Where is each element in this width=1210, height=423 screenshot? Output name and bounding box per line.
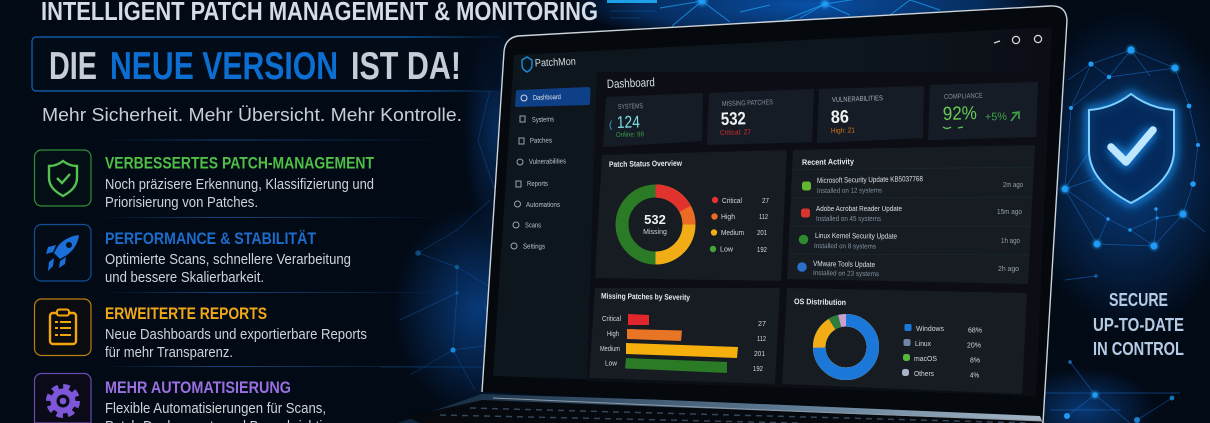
panel: recent activity: Recent Activity (802, 157, 855, 167)
feature: reports (34, 299, 367, 361)
bar chart: 201 (754, 349, 765, 358)
sidebar: Scans (525, 220, 541, 230)
feature description: Neue Dashboards und exportierbare Reports (105, 327, 367, 343)
sidebar (511, 87, 591, 251)
activity row: VMware: VMware Tools Update (813, 259, 875, 269)
feature description: für mehr Transparenz. (105, 345, 233, 361)
feature: performance (34, 224, 351, 286)
activity row: Linux (799, 231, 1020, 251)
feature description: und bessere Skalierbarkeit. (105, 270, 264, 286)
card: systems (603, 93, 703, 147)
headline box (32, 37, 500, 91)
activity row: Microsoft: Installed on 12 systems (817, 187, 882, 195)
legend: High (721, 212, 735, 221)
card: systems: ( (609, 120, 613, 131)
brand: PatchMon (535, 56, 576, 69)
card: compliance: COMPLIANCE (944, 93, 983, 101)
laptop (398, 6, 1067, 423)
card: vulnerabilities: VULNERABILITIES (832, 95, 883, 104)
legend: macOS (914, 354, 937, 363)
card: compliance: 92% (943, 103, 977, 125)
card: systems: 124 (617, 112, 640, 132)
legend (902, 324, 982, 380)
screen (493, 27, 1052, 396)
sidebar: Reports (527, 179, 548, 188)
activity row: Linux: Installed on 8 systems (814, 243, 876, 251)
legend: 112 (759, 212, 768, 221)
feature: automation (34, 374, 370, 423)
card: missing patches: 532 (721, 108, 746, 129)
legend: 192 (757, 245, 767, 254)
activity row: Linux: 1h ago (1001, 238, 1020, 245)
panel: missing patches by severity (589, 288, 780, 384)
network pattern (380, 0, 1205, 423)
icon: glowing shield (1089, 94, 1174, 203)
brand (522, 56, 576, 72)
sidebar: Systems (532, 114, 554, 124)
icon: green shield (34, 150, 91, 206)
right tagline (1093, 290, 1184, 359)
activity row: VMware (797, 259, 1019, 278)
legend: Critical (722, 196, 742, 205)
activity row: Adobe: Installed on 45 systems (816, 216, 881, 223)
card: missing patches: Critical: 27 (720, 127, 751, 137)
sidebar: Dashboard (533, 92, 561, 102)
legend: 27 (762, 196, 769, 205)
feature: patch management (34, 150, 374, 211)
card: compliance: +5% (985, 111, 1007, 123)
icon: rocket (34, 224, 91, 281)
bar chart: 27 (758, 319, 766, 328)
headline text: DIE (49, 45, 97, 88)
card: vulnerabilities: High: 21 (831, 125, 855, 135)
feature title: MEHR AUTOMATISIERUNG (105, 378, 291, 397)
panel: missing patches by severity: Missing Patches by Severity (601, 292, 691, 302)
activity row: VMware: 2h ago (998, 266, 1019, 273)
feature description: Priorisierung von Patches. (105, 195, 258, 211)
legend: Low (720, 244, 733, 254)
bar chart: High (607, 329, 619, 338)
feature description: Noch präzisere Erkennung, Klassifizierung und (105, 177, 374, 193)
feature description (105, 327, 367, 361)
donut chart: 532 (644, 212, 666, 227)
legend: Others (914, 369, 934, 378)
dividers (100, 140, 450, 367)
sidebar: Vulnerabilities (529, 156, 566, 166)
sidebar: Automations (526, 200, 560, 209)
legend: Medium (721, 228, 744, 237)
top-right controls (994, 35, 1042, 44)
bar chart: 112 (757, 334, 766, 343)
legend: Windows (916, 324, 944, 333)
feature title: VERBESSERTES PATCH-MANAGEMENT (105, 153, 374, 172)
activity row: Microsoft: Microsoft Security Update KB5037768 (817, 174, 923, 185)
feature title: PERFORMANCE & STABILITÄT (105, 229, 317, 248)
activity row: Microsoft: 2m ago (1003, 182, 1023, 189)
accent line (607, 0, 657, 3)
legend: 68% (968, 326, 982, 334)
headline text: NEUE VERSION (110, 45, 338, 88)
headline text: IST DA! (351, 45, 461, 88)
right tagline: UP-TO-DATE (1093, 315, 1184, 335)
right tagline: SECURE (1109, 290, 1168, 310)
panel: patch status overview: Patch Status Overview (609, 159, 683, 169)
card: systems: SYSTEMS (618, 103, 643, 111)
card: systems: Online: 98 (616, 131, 644, 139)
bar chart: Medium (600, 344, 620, 353)
bar chart: Critical (602, 314, 621, 323)
activity row: VMware: Installed on 23 systems (813, 270, 880, 278)
legend: Linux (915, 339, 931, 348)
feature description (105, 252, 351, 286)
active nav item (515, 87, 591, 107)
feature description: Flexible Automatisierungen für Scans, (105, 401, 326, 417)
activity row: Adobe: Adobe Acrobat Reader Update (816, 204, 902, 213)
laptop base (398, 394, 1043, 423)
feature title: ERWEITERTE REPORTS (105, 304, 267, 323)
card: compliance (928, 82, 1038, 140)
lid outline (482, 6, 1067, 423)
feature description (105, 177, 374, 211)
legend: 4% (970, 370, 979, 380)
legend: 201 (757, 228, 767, 237)
sidebar: Settings (523, 242, 545, 251)
page title: Dashboard (607, 75, 655, 91)
icon: gear (34, 374, 91, 423)
card: vulnerabilities (817, 86, 924, 143)
laptop lid (482, 6, 1067, 423)
panel: OS distribution: OS Distribution (794, 297, 846, 307)
right tagline: IN CONTROL (1093, 339, 1184, 359)
legend: 20% (967, 340, 981, 350)
feature description (105, 401, 370, 423)
activity row: Adobe: 15m ago (997, 209, 1022, 216)
card: vulnerabilities: 86 (831, 107, 849, 127)
subtitle: Mehr Sicherheit. Mehr Übersicht. Mehr Kontrolle. (42, 104, 462, 125)
bar chart: 192 (753, 364, 763, 373)
feature description: Optimierte Scans, schnellere Verarbeitung (105, 252, 351, 268)
activity row: Adobe (801, 204, 1022, 223)
legend (710, 196, 769, 254)
icon: clipboard (34, 299, 91, 356)
card: missing patches (707, 89, 814, 145)
donut chart: Missing (643, 229, 667, 236)
legend: 8% (970, 356, 980, 364)
donut chart (819, 320, 873, 374)
activity row: Microsoft (802, 174, 1023, 195)
panel: recent activity (787, 145, 1035, 284)
sidebar: Patches (530, 135, 552, 145)
card: missing patches: MISSING PATCHES (722, 99, 773, 108)
panel: OS distribution (782, 288, 1027, 394)
activity row: Linux: Linux Kernel Security Update (815, 231, 897, 241)
panel: patch status overview (595, 150, 787, 281)
donut chart (622, 191, 689, 258)
bar chart: Low (605, 358, 617, 368)
bar chart (600, 314, 766, 373)
